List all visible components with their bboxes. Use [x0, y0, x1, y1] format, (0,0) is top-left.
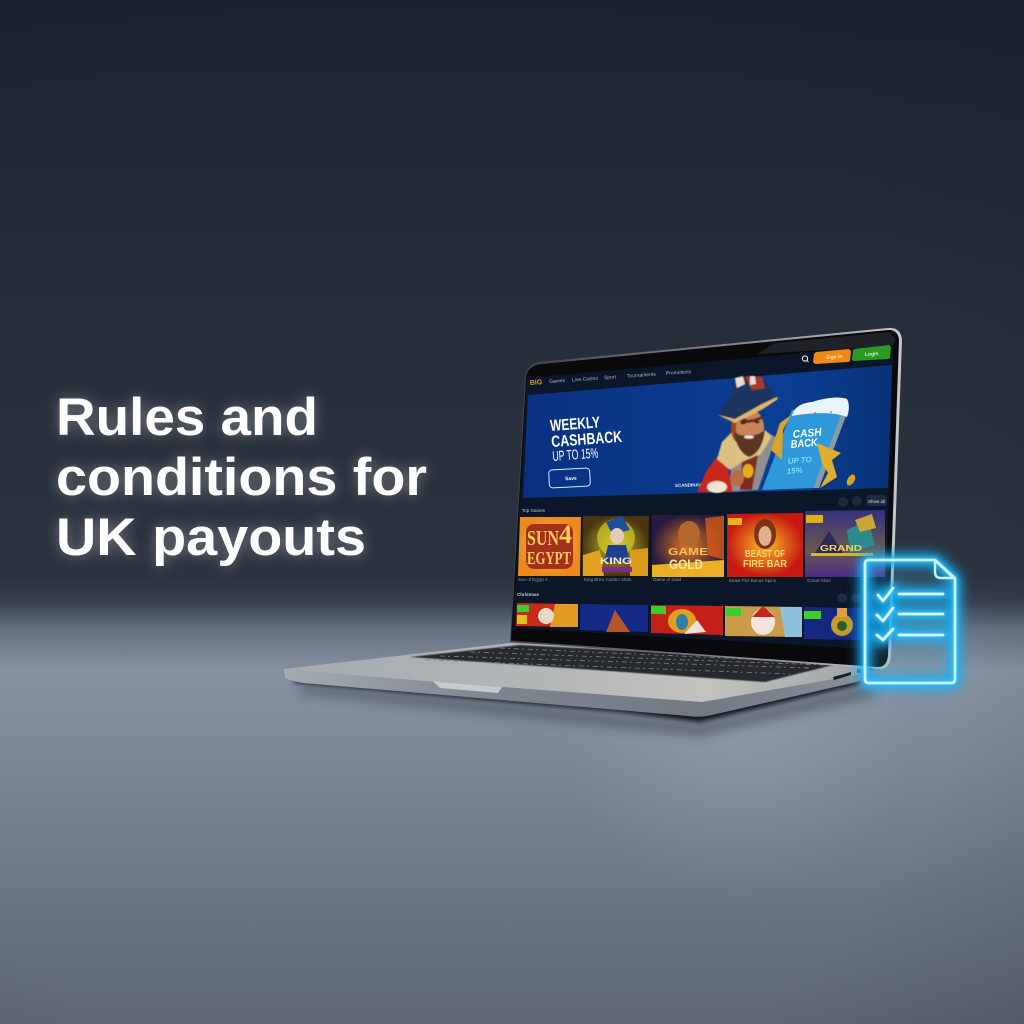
game tile: pyramid: GRAND — [820, 544, 862, 553]
nav items — [549, 369, 692, 385]
tile captions — [518, 577, 832, 583]
logo: BIG — [530, 379, 543, 387]
tile captions: Game of Gold — [653, 577, 682, 582]
document outline — [865, 560, 955, 683]
game tile: pyramid — [805, 510, 885, 577]
laptop shadow on floor — [292, 678, 875, 735]
nav items: Tournaments — [627, 372, 656, 380]
laptop — [284, 328, 902, 735]
title — [56, 388, 427, 567]
screen content — [513, 345, 893, 650]
row heading and controls: Top Games — [522, 508, 546, 513]
game tile: festive two — [580, 604, 648, 632]
games row one — [518, 495, 887, 583]
title: UK payouts — [56, 508, 366, 567]
title: conditions for — [56, 448, 427, 507]
game tile: ornament — [804, 607, 862, 640]
folded corner — [935, 560, 955, 578]
title: conditions for — [56, 448, 427, 507]
game tile: santa — [725, 606, 802, 637]
sign in button — [813, 349, 851, 364]
screen bezel — [511, 330, 899, 667]
banner headline: CASHBACK — [551, 429, 623, 451]
small banner caption: SCANDINAVIAN — [675, 482, 709, 488]
banner headline: UP TO 15% — [552, 445, 599, 464]
row heading and controls: Show all — [868, 499, 885, 504]
tile captions: Grand Slots — [807, 578, 832, 583]
game tile: festive one — [516, 603, 578, 627]
game tile: sun of egypt — [518, 517, 581, 576]
bezel reflection — [757, 332, 896, 354]
phone with cashback graphic: UP TO — [787, 455, 813, 466]
nav items: Live Casino — [572, 376, 599, 383]
phone with cashback graphic: CASH — [792, 426, 823, 441]
game tile: gold: GAME — [668, 547, 708, 558]
search icon — [802, 356, 808, 362]
checklist ticks and lines — [877, 588, 943, 640]
row heading and controls — [517, 592, 861, 603]
nav items: Sport — [604, 374, 617, 381]
tile captions: Beast Fire Bonus Spins — [729, 578, 777, 583]
tile captions: King Brew Casino Slots — [584, 577, 632, 582]
game tile: wizard: KING — [600, 556, 632, 566]
banner headline — [550, 413, 624, 464]
row heading and controls: Christmas — [517, 592, 540, 597]
register button: Login — [865, 351, 879, 358]
game tile: gold — [652, 515, 724, 577]
hero banner — [523, 365, 892, 498]
title: UK payouts — [56, 508, 366, 567]
game tile: gold: GOLD — [669, 556, 703, 572]
game tile: sun of egypt: 4 — [559, 520, 572, 549]
game tile: fire jester: BEAST OF — [745, 549, 785, 560]
gold coin — [742, 464, 754, 478]
keyboard — [410, 645, 845, 682]
tile captions: Sun of Egypt 4 — [518, 577, 548, 582]
game tile: wizard — [582, 516, 649, 576]
phone with cashback graphic: BACK — [790, 437, 819, 451]
game tile: sun of egypt: EGYPT — [527, 548, 571, 568]
game tile: festive three — [651, 605, 723, 635]
laptop base — [284, 643, 887, 717]
pirate illustration — [697, 376, 778, 493]
translucent document body — [865, 560, 955, 683]
nav items: Promotions — [666, 369, 692, 377]
laptop lid frame — [510, 328, 902, 669]
banner button — [549, 468, 590, 488]
banner headline: WEEKLY — [550, 414, 601, 435]
inner halo — [865, 560, 955, 683]
nav bar — [530, 345, 891, 387]
title: Rules and — [56, 388, 318, 447]
phone with cashback graphic — [762, 398, 857, 490]
outer glow — [865, 560, 955, 683]
banner button: Save — [565, 476, 577, 482]
register button — [852, 345, 891, 361]
nav items: Games — [549, 378, 566, 385]
sign in button: Sign in — [826, 354, 843, 361]
phone with cashback graphic: 15% — [786, 466, 803, 476]
glowing document checklist icon — [865, 560, 955, 683]
title: Rules and — [56, 388, 318, 447]
game tile: fire jester: FIRE BAR — [743, 559, 788, 570]
game tile: fire jester — [727, 513, 803, 577]
game tile: sun of egypt: SUN — [527, 526, 559, 550]
gold arrows — [771, 415, 791, 460]
games row two — [516, 592, 862, 640]
row heading and controls — [522, 495, 887, 513]
